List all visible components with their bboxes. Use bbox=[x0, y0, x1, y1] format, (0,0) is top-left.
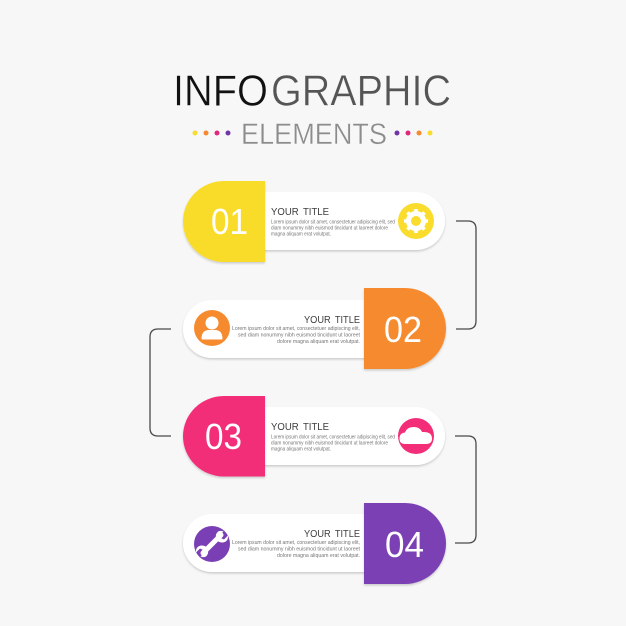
right title dots bbox=[394, 130, 432, 136]
title: GRAPHIC bbox=[271, 66, 451, 116]
body text: Lorem ipsum dolor sit amet, consectetuer adipiscing elit, sed bbox=[271, 220, 395, 226]
body text: magna aliquam erat volutpat. bbox=[271, 232, 331, 238]
panel: step 04 bbox=[183, 503, 446, 584]
heading: YOUR TITLE bbox=[304, 528, 360, 540]
body text: Lorem ipsum dolor sit amet, consectetuer adipiscing elit, bbox=[232, 540, 360, 546]
number: 03 bbox=[205, 416, 242, 457]
card body bbox=[220, 192, 445, 250]
heading: YOUR TITLE bbox=[271, 206, 329, 218]
panel: step 01 bbox=[183, 181, 445, 262]
body text: Lorem ipsum dolor sit amet, consectetuer adipiscing elit, sed bbox=[271, 434, 395, 440]
number tab bbox=[183, 396, 265, 476]
connector 3 to 4 bbox=[455, 436, 476, 543]
left title dots bbox=[192, 130, 230, 136]
title bbox=[173, 66, 451, 116]
number tab bbox=[364, 288, 446, 369]
card body bbox=[183, 300, 408, 358]
body text: dolore magna aliquam erat volutpat. bbox=[277, 339, 360, 345]
connector 1 to 2 bbox=[456, 221, 476, 329]
body text bbox=[232, 326, 361, 345]
icon: gear bbox=[398, 203, 434, 239]
body text: magna aliquam erat volutpat. bbox=[271, 446, 331, 452]
panel: step 02 bbox=[183, 288, 446, 369]
icon: cloud bbox=[398, 418, 434, 454]
heading: YOUR TITLE bbox=[271, 421, 329, 433]
heading: YOUR TITLE bbox=[304, 314, 360, 326]
body text bbox=[271, 434, 395, 452]
icon: wrench bbox=[194, 526, 230, 562]
body text: diam nonummy nibh euismod tincidunt ut laoreet dolore bbox=[271, 226, 388, 232]
body text: Lorem ipsum dolor sit amet, consectetuer adipiscing elit, bbox=[232, 326, 360, 332]
body text: sed diam nonummy nibh euismod tincidunt ut laoreet bbox=[238, 332, 361, 338]
card body bbox=[220, 407, 445, 465]
body text: diam nonummy nibh euismod tincidunt ut laoreet dolore bbox=[271, 440, 388, 446]
connector 2 to 3 bbox=[150, 329, 171, 436]
subtitle: ELEMENTS bbox=[241, 118, 387, 151]
number: 02 bbox=[384, 309, 422, 350]
body text: dolore magna aliquam erat volutpat. bbox=[277, 553, 360, 559]
body text bbox=[271, 220, 395, 238]
number: 04 bbox=[385, 524, 424, 565]
icon: person bbox=[194, 310, 230, 346]
card body bbox=[183, 514, 408, 572]
number: 01 bbox=[211, 201, 248, 242]
number tab bbox=[364, 503, 446, 584]
body text: sed diam nonummy nibh euismod tincidunt ut laoreet bbox=[238, 546, 361, 552]
number tab bbox=[183, 181, 265, 262]
body text bbox=[232, 540, 361, 559]
panel: step 03 bbox=[183, 396, 445, 476]
title: INFO bbox=[173, 66, 268, 116]
